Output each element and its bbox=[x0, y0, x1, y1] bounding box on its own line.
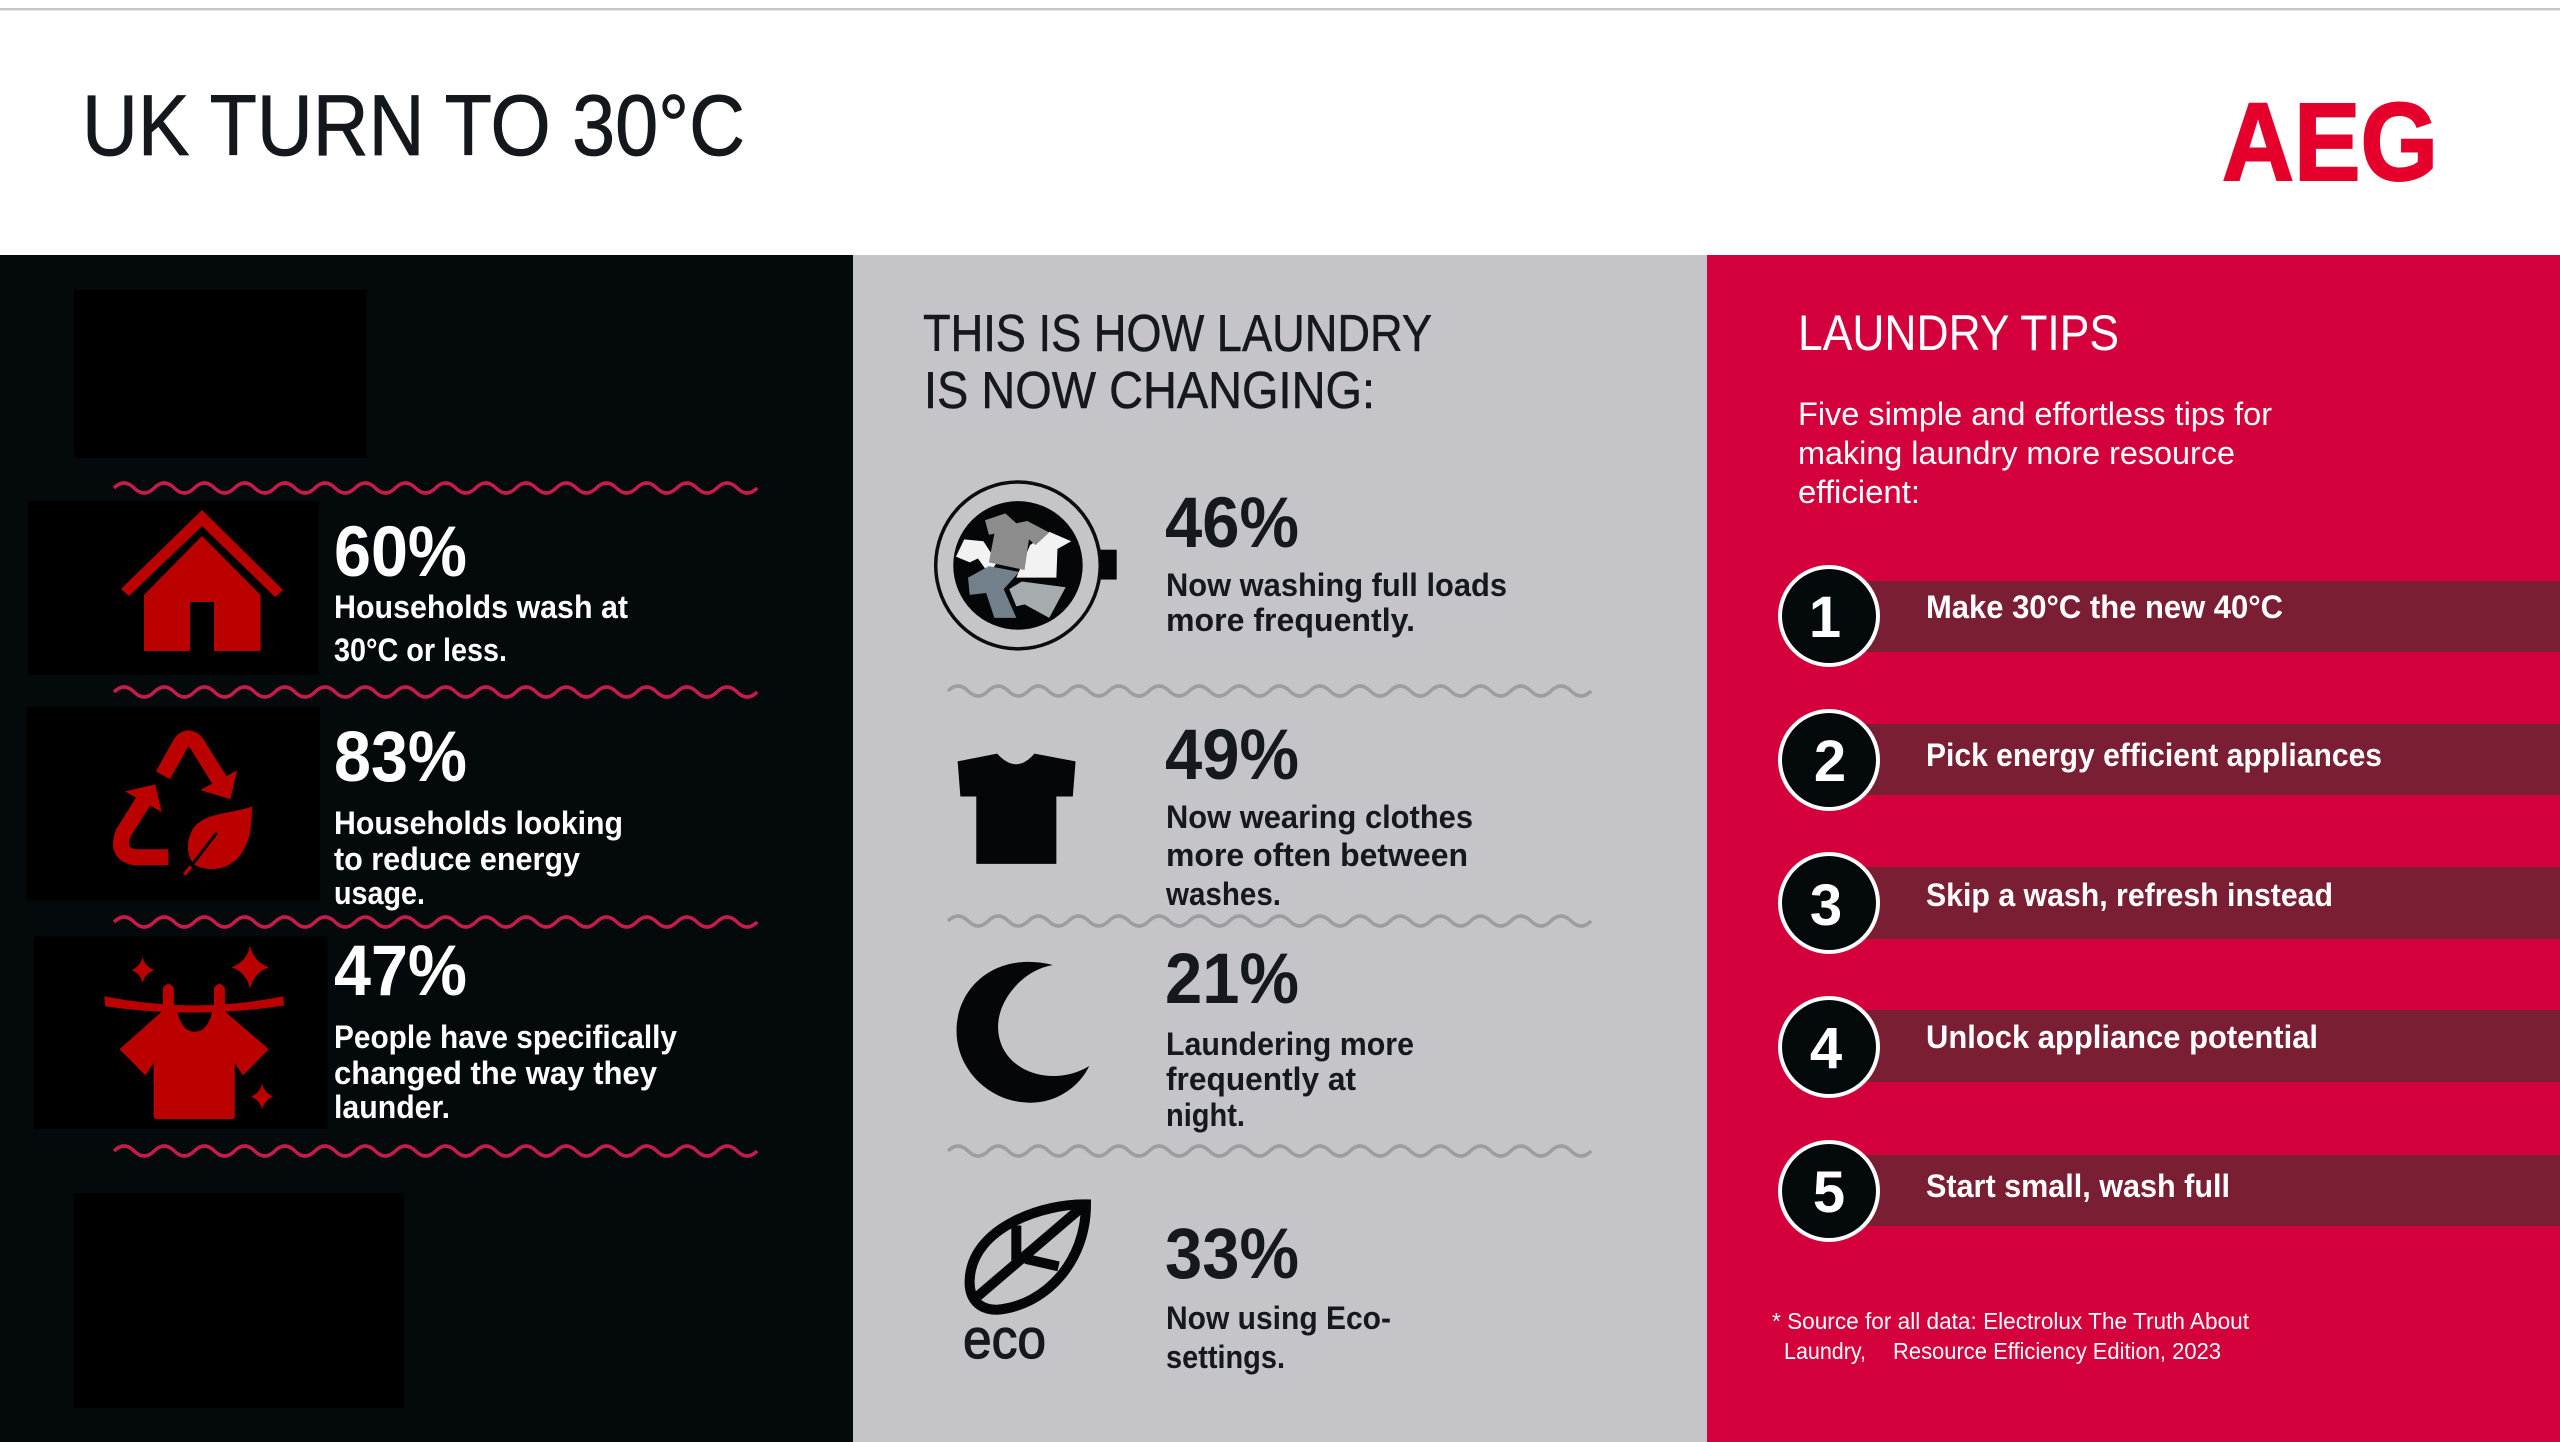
stat: 47%: People have specifically bbox=[334, 1019, 677, 1055]
tip 4: 4 bbox=[1810, 1016, 1842, 1081]
heading: IS NOW CHANGING: bbox=[924, 362, 1375, 420]
stat: 83%: usage. bbox=[334, 875, 425, 911]
icon: house bbox=[28, 501, 319, 675]
stat: 46% bbox=[1165, 484, 1507, 638]
intro text: making laundry more resource bbox=[1798, 435, 2235, 471]
divider wave 3 bbox=[114, 917, 757, 927]
stat: 33%: settings. bbox=[1166, 1339, 1285, 1375]
tip 3: 3 bbox=[1810, 873, 1842, 938]
tip 5: Start small, wash full bbox=[1926, 1168, 2230, 1204]
panel: how laundry is changing bbox=[853, 255, 1707, 1442]
stat: 21%: night. bbox=[1166, 1097, 1245, 1133]
icon: shirt on washing line bbox=[34, 936, 327, 1129]
divider wave 2 bbox=[114, 687, 757, 697]
stat: 49%: 49% bbox=[1165, 716, 1299, 795]
tip 5 bbox=[1780, 1142, 2560, 1240]
stat: 33% bbox=[1165, 1215, 1391, 1375]
icon: t-shirt bbox=[958, 754, 1076, 864]
stat: 60% bbox=[334, 513, 628, 668]
stat: 21%: 21% bbox=[1165, 940, 1299, 1019]
panel: UK statistics bbox=[0, 255, 853, 1442]
tip 1 bbox=[1780, 567, 2560, 665]
stat: 47%: changed the way they bbox=[334, 1055, 657, 1091]
source footnote: Resource Efficiency Edition, 2023 bbox=[1893, 1338, 2221, 1364]
logo: AEG: AEG bbox=[2222, 81, 2438, 204]
source footnote bbox=[1772, 1308, 2250, 1364]
stat: 47%: launder. bbox=[334, 1089, 450, 1125]
stat: 21% bbox=[1165, 940, 1414, 1133]
stat: 21%: Laundering more bbox=[1166, 1026, 1414, 1062]
icon: moon bbox=[957, 962, 1089, 1103]
title: UK TURN TO 30°C bbox=[82, 78, 745, 174]
stat: 60%: 30°C or less. bbox=[334, 632, 507, 668]
tip 1: 1 bbox=[1809, 585, 1841, 650]
heading: THIS IS HOW LAUNDRY bbox=[923, 305, 1432, 363]
divider wave 1 bbox=[114, 483, 757, 493]
stat: 46%: more frequently. bbox=[1166, 602, 1415, 638]
tip 1: Make 30°C the new 40°C bbox=[1926, 589, 2283, 625]
stat: 33%: Now using Eco- bbox=[1166, 1300, 1391, 1336]
tip 2 bbox=[1780, 711, 2560, 809]
source footnote: Laundry, bbox=[1784, 1338, 1866, 1364]
stat: 33%: 33% bbox=[1165, 1215, 1299, 1294]
panel: laundry tips bbox=[1707, 255, 2560, 1442]
divider wave 3 bbox=[948, 1146, 1591, 1156]
stat: 83%: to reduce energy bbox=[334, 841, 580, 877]
divider wave 4 bbox=[114, 1146, 757, 1156]
stat: 49%: Now wearing clothes bbox=[1166, 799, 1473, 835]
stat: 46%: 46% bbox=[1165, 484, 1299, 563]
stat: 49%: washes. bbox=[1165, 876, 1281, 912]
stat: 47% bbox=[334, 932, 677, 1125]
intro text: efficient: bbox=[1798, 474, 1920, 510]
stat: 49% bbox=[1165, 716, 1473, 912]
tip 5: 5 bbox=[1813, 1160, 1845, 1225]
icon: washing machine drum bbox=[936, 482, 1117, 649]
divider wave 2 bbox=[948, 916, 1591, 926]
stat: 46%: Now washing full loads bbox=[1166, 567, 1507, 603]
stat: 83%: 83% bbox=[334, 718, 467, 797]
icon: eco leaf: eco bbox=[963, 1307, 1046, 1370]
redacted block top bbox=[74, 290, 367, 458]
tip 3 bbox=[1780, 854, 2560, 952]
tip 2: Pick energy efficient appliances bbox=[1926, 737, 2382, 773]
icon: recycle with leaf bbox=[26, 707, 320, 900]
heading: LAUNDRY TIPS bbox=[1798, 305, 2119, 361]
heading bbox=[923, 305, 1432, 420]
tip 2: 2 bbox=[1814, 729, 1846, 794]
stat: 47%: 47% bbox=[334, 932, 467, 1011]
intro text bbox=[1798, 396, 2272, 510]
stat: 60%: 60% bbox=[334, 513, 467, 592]
redacted block bottom bbox=[74, 1193, 404, 1408]
tip 4 bbox=[1780, 998, 2560, 1096]
icon: eco leaf bbox=[963, 1204, 1086, 1370]
source footnote: * Source for all data: Electrolux The Truth About bbox=[1772, 1308, 2250, 1334]
intro text: Five simple and effortless tips for bbox=[1798, 396, 2272, 432]
stat: 21%: frequently at bbox=[1166, 1061, 1356, 1097]
tip 3: Skip a wash, refresh instead bbox=[1926, 877, 2333, 913]
stat: 60%: Households wash at bbox=[334, 589, 628, 625]
divider wave 1 bbox=[948, 686, 1591, 696]
stat: 83%: Households looking bbox=[334, 805, 623, 841]
stat: 83% bbox=[334, 718, 623, 911]
tip 4: Unlock appliance potential bbox=[1926, 1019, 2318, 1055]
stat: 49%: more often between bbox=[1166, 837, 1468, 873]
